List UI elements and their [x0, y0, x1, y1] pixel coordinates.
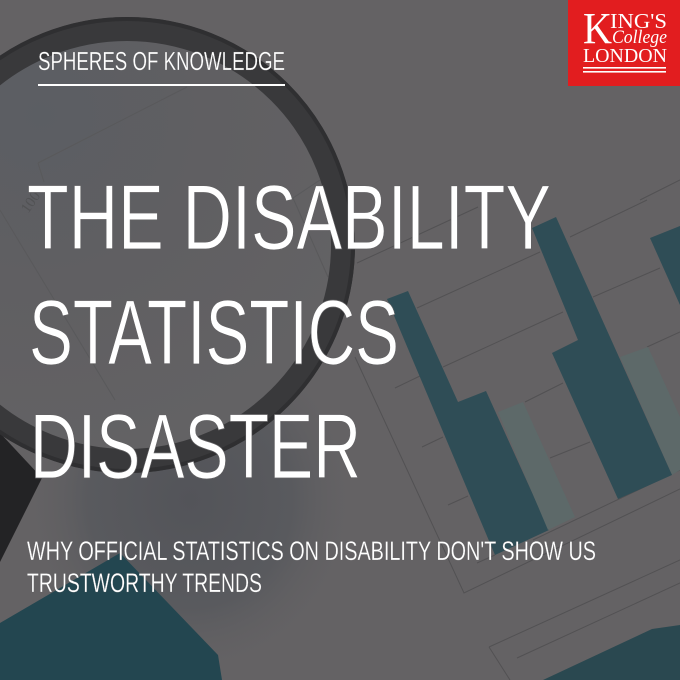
- logo: King's College London: College: [612, 27, 667, 48]
- lens label: rotated number: 100: [18, 189, 44, 216]
- chart bars: [387, 217, 680, 555]
- magnifying glass: [0, 19, 353, 562]
- teal shape bottom right: [543, 625, 680, 680]
- title: STATISTICS: [29, 282, 399, 384]
- logo: King's College London: LONDON: [583, 45, 667, 67]
- subtitle: TRUSTWORTHY TRENDS: [27, 568, 262, 598]
- series label underline: [38, 84, 285, 86]
- teal shape bottom left: [0, 553, 222, 680]
- title: DISASTER: [30, 396, 361, 498]
- title: [27, 167, 551, 498]
- series label: SPHERES OF KNOWLEDGE: [38, 46, 285, 76]
- logo: King's College London: ING'S: [610, 9, 667, 33]
- logo: King's College London: K: [583, 4, 612, 53]
- subtitle: [27, 536, 596, 598]
- logo: King's College London: [568, 0, 680, 86]
